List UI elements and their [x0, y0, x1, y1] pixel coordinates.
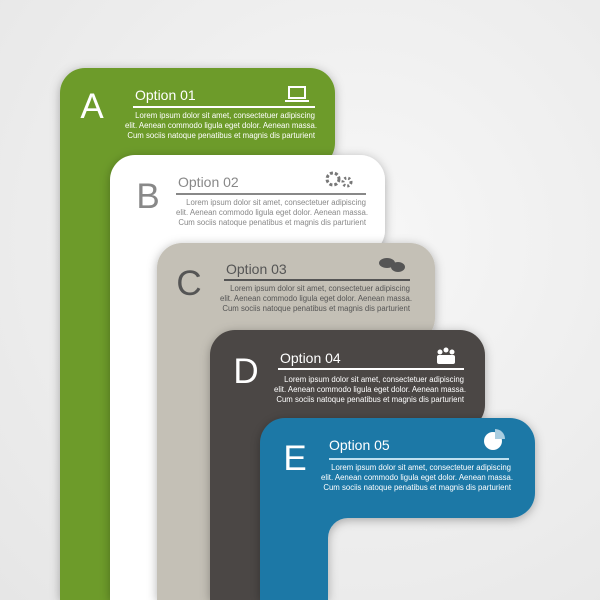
panel E text — [283, 437, 513, 492]
panel A text: elit. Aenean commodo ligula eget dolor. Aenean massa. — [125, 121, 317, 130]
panel C text: Cum sociis natoque penatibus et magnis dis parturient — [222, 304, 410, 313]
panel B text: Lorem ipsum dolor sit amet, consectetuer adipiscing — [186, 198, 366, 207]
panel E text: Lorem ipsum dolor sit amet, consectetuer adipiscing — [331, 463, 511, 472]
panel B text: Cum sociis natoque penatibus et magnis dis parturient — [178, 218, 366, 227]
panel E text: Option 05 — [329, 437, 390, 453]
panel D text: Option 04 — [280, 350, 341, 366]
panel B text: elit. Aenean commodo ligula eget dolor. Aenean massa. — [176, 208, 368, 217]
card B shape — [110, 155, 385, 600]
icon: laptop — [285, 87, 309, 101]
card A shape — [60, 68, 335, 600]
panel B text: Option 02 — [178, 174, 239, 190]
panel D text — [233, 350, 466, 404]
panel E text: Cum sociis natoque penatibus et magnis dis parturient — [323, 483, 511, 492]
panel C text: Lorem ipsum dolor sit amet, consectetuer adipiscing — [230, 284, 410, 293]
panel B text: B — [136, 177, 160, 216]
panel E text: E — [283, 439, 307, 478]
panel A text: Option 01 — [135, 87, 196, 103]
panel B text — [136, 174, 368, 227]
card C shape — [157, 243, 435, 600]
panel E text: elit. Aenean commodo ligula eget dolor. Aenean massa. — [321, 473, 513, 482]
icon: gears — [327, 173, 351, 186]
panel C text: Option 03 — [226, 261, 287, 277]
panel C text: elit. Aenean commodo ligula eget dolor. Aenean massa. — [220, 294, 412, 303]
panel A text: A — [80, 87, 104, 126]
icon: pie chart — [484, 429, 505, 450]
panel A text: Lorem ipsum dolor sit amet, consectetuer adipiscing — [135, 111, 315, 120]
panel C text — [176, 261, 412, 313]
icon: people — [437, 348, 455, 364]
icon: speech bubbles — [379, 258, 405, 272]
panel D text: elit. Aenean commodo ligula eget dolor. Aenean massa. — [274, 385, 466, 394]
panel C text: C — [176, 264, 202, 303]
card E shape — [260, 418, 535, 600]
panel D text: Cum sociis natoque penatibus et magnis dis parturient — [276, 395, 464, 404]
panel A text — [80, 87, 317, 140]
panel A text: Cum sociis natoque penatibus et magnis dis parturient — [127, 131, 315, 140]
card D shape — [210, 330, 485, 600]
panel D text: D — [233, 352, 259, 391]
panel D text: Lorem ipsum dolor sit amet, consectetuer adipiscing — [284, 375, 464, 384]
